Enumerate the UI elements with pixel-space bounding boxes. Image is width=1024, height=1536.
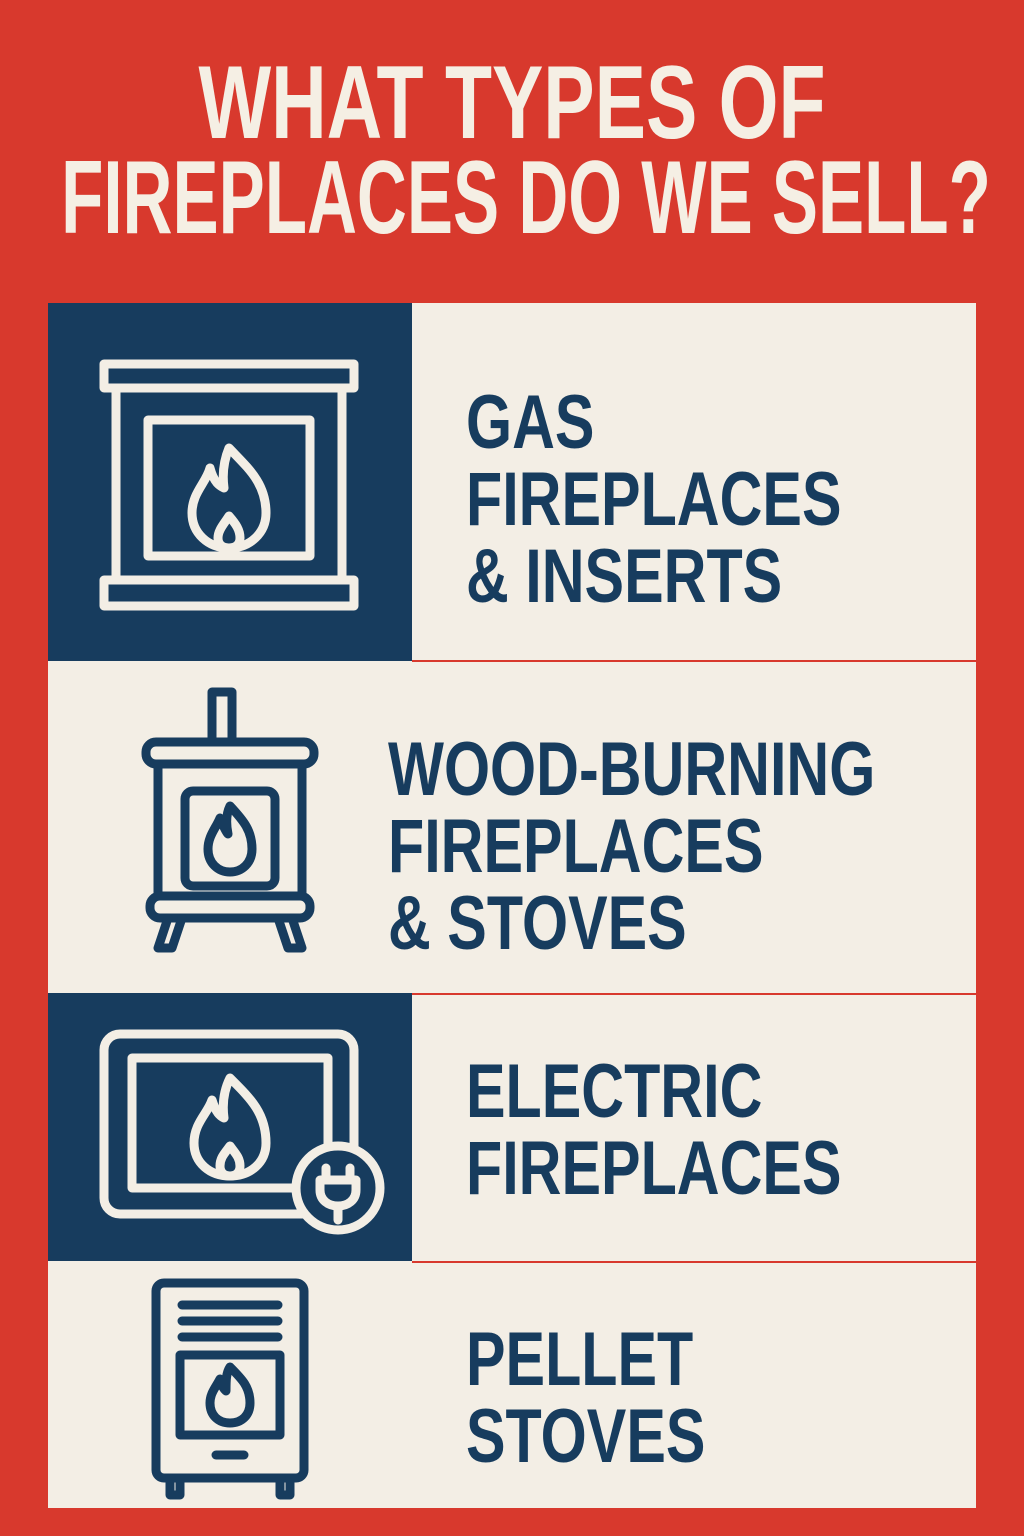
label: gas: FIREPLACES [466, 457, 841, 542]
row: gas [48, 303, 841, 661]
row: wood-burning [142, 688, 875, 966]
label: wood-burning: FIREPLACES [388, 804, 763, 889]
label: electric: ELECTRIC [466, 1049, 762, 1134]
panel: fireplace types [48, 303, 976, 1508]
icon: wood stove [142, 688, 318, 952]
row: electric [48, 993, 841, 1261]
label: pellet: STOVES [466, 1394, 705, 1479]
row: pellet [152, 1278, 705, 1500]
label: wood-burning: WOOD-BURNING [388, 727, 875, 812]
label: gas: & INSERTS [466, 534, 782, 619]
icon: pellet stove [152, 1278, 308, 1500]
label: electric [466, 1049, 841, 1211]
label: gas [466, 380, 841, 619]
title: FIREPLACES DO WE SELL? [61, 140, 991, 256]
title [61, 45, 991, 256]
label: gas: GAS [466, 380, 594, 465]
label: wood-burning: & STOVES [388, 881, 687, 966]
title: WHAT TYPES OF [198, 45, 826, 161]
label: pellet [466, 1317, 705, 1479]
label: wood-burning [388, 727, 875, 966]
label: electric: FIREPLACES [466, 1126, 841, 1211]
icon: electric fireplace [100, 1030, 384, 1234]
icon: gas fireplace [100, 360, 358, 610]
label: pellet: PELLET [466, 1317, 693, 1402]
